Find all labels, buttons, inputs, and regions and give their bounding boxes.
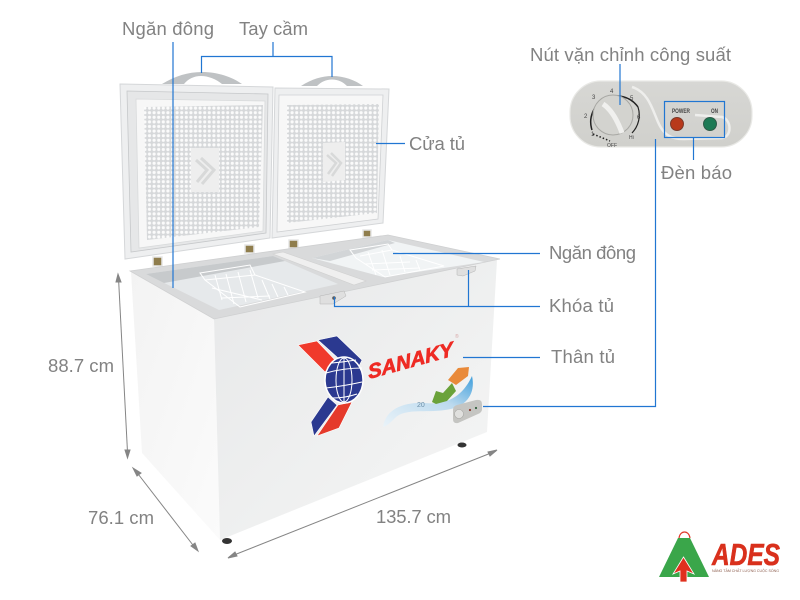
decorative wave graphic xyxy=(383,367,473,427)
label: Ngăn đông top: Ngăn đông xyxy=(122,18,214,39)
line: Thân tủ xyxy=(463,356,540,358)
cabinet side face xyxy=(131,272,220,540)
arrow: width xyxy=(228,450,497,558)
lock right xyxy=(457,266,476,276)
line: Nút vặn xyxy=(619,64,621,105)
line: Đèn báo xyxy=(692,137,694,160)
dial numbers xyxy=(584,89,641,149)
label: depth: 76.1 cm xyxy=(88,507,154,528)
dial knob xyxy=(593,95,633,135)
right compartment back wall xyxy=(312,240,395,261)
left lid handle xyxy=(162,72,242,84)
decorative wave graphic: 20 xyxy=(417,402,425,409)
logo bag handle xyxy=(679,532,690,538)
label: Thân tủ: Thân tủ xyxy=(551,346,615,367)
top rim xyxy=(130,235,500,319)
indicator box xyxy=(664,102,724,138)
control panel close-up xyxy=(570,81,752,149)
POWER label: POWER xyxy=(672,109,691,115)
dial ticks xyxy=(591,96,639,141)
dial numbers: 5 xyxy=(630,96,634,102)
label: Khóa tủ: Khóa tủ xyxy=(549,295,614,316)
dial numbers: 1 xyxy=(591,132,595,138)
dial numbers: 6 xyxy=(637,115,641,121)
on indicator xyxy=(704,118,716,130)
line: Ngăn đông left xyxy=(172,42,174,288)
label: width: 135.7 cm xyxy=(376,506,451,527)
labels xyxy=(48,18,732,528)
logo wordmark: ADES xyxy=(711,537,781,572)
logo globe xyxy=(325,357,363,403)
arrow: height xyxy=(116,274,130,458)
left basket xyxy=(200,265,305,307)
recess swoosh xyxy=(632,87,730,139)
logo blue upper band xyxy=(318,336,362,368)
dial numbers: 3 xyxy=(592,95,596,101)
left compartment xyxy=(146,256,338,310)
left compartment back wall xyxy=(146,256,285,283)
right basket xyxy=(350,244,444,277)
right lid xyxy=(272,88,389,238)
logo red upper band xyxy=(298,341,337,372)
label: height: 88.7 cm xyxy=(48,355,114,376)
logo wordmark: SANAKY xyxy=(367,338,456,384)
label: Tay cầm: Tay cầm xyxy=(239,18,308,39)
label: Nút vặn chỉnh công suất: Nút vặn chỉnh công suất xyxy=(530,44,731,65)
power indicator xyxy=(670,118,684,130)
left lid xyxy=(120,84,273,259)
label: Ngăn đông right: Ngăn đông xyxy=(549,242,636,263)
logo green bag xyxy=(659,538,709,577)
freezer illustration xyxy=(120,72,500,544)
label: Đèn báo: Đèn báo xyxy=(661,162,732,183)
dimension arrows xyxy=(116,274,497,558)
Sanaky logo xyxy=(298,333,459,436)
lock left xyxy=(320,291,346,304)
ON label: ON xyxy=(711,109,718,115)
line: Tay cầm bracket xyxy=(202,42,332,77)
feet xyxy=(222,442,466,544)
dial numbers: Hi xyxy=(629,135,634,141)
logo red arrow xyxy=(673,557,694,582)
cabinet front face xyxy=(214,260,497,540)
ADES brand logo xyxy=(659,532,781,582)
dial numbers: 4 xyxy=(610,89,614,95)
mini control panel xyxy=(453,400,482,423)
line: Ngăn đông right xyxy=(393,252,540,254)
line: control panel leader xyxy=(483,139,656,406)
label: Cửa tủ: Cửa tủ xyxy=(409,133,465,154)
arrow: depth xyxy=(133,468,198,551)
line: Khóa tủ xyxy=(334,270,540,306)
callout lines xyxy=(173,42,724,406)
registered mark: ® xyxy=(455,333,459,340)
logo tagline: NÂNG TẦM CHẤT LƯỢNG CUỘC SỐNG xyxy=(712,568,779,573)
right compartment xyxy=(312,240,484,277)
panel body xyxy=(570,81,752,147)
dial numbers: OFF xyxy=(607,143,617,149)
right lid handle xyxy=(301,76,363,86)
divider xyxy=(273,252,366,285)
line: Cửa tủ xyxy=(376,142,405,144)
logo blue lower band xyxy=(311,397,337,436)
logo red lower band xyxy=(317,402,352,436)
dial numbers: 2 xyxy=(584,114,588,120)
hinges xyxy=(153,230,371,266)
